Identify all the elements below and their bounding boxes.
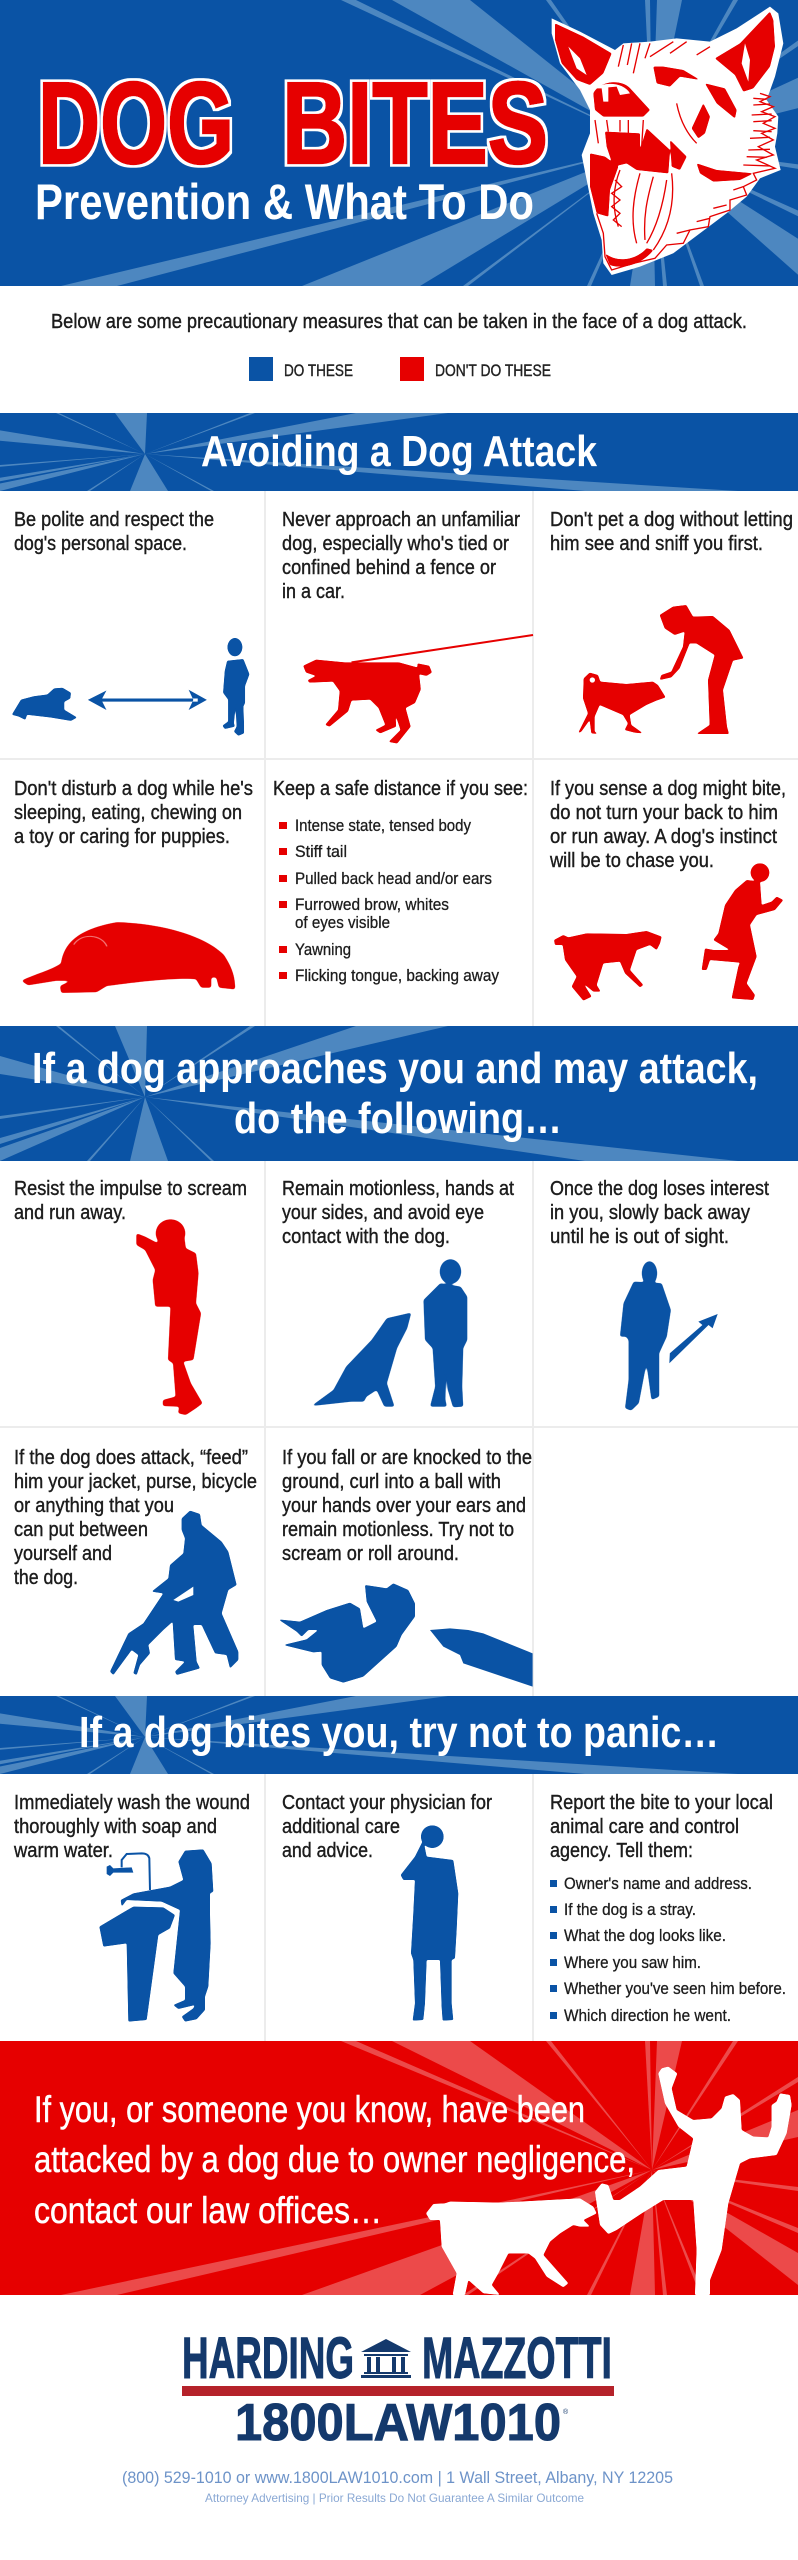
grid dividers, section 2 bbox=[0, 1161, 798, 1696]
text: be polite bbox=[14, 509, 214, 555]
text: if the dog does attack: or anything that you bbox=[14, 1495, 174, 1517]
text: if you fall: remain motionless. Try not to bbox=[282, 1519, 514, 1541]
panel: don't scream bbox=[14, 1178, 247, 1415]
text: if you sense: or run away. A dog's instinct bbox=[550, 826, 777, 848]
icon: snarling dog head bbox=[552, 7, 783, 275]
text: don't pet bbox=[550, 509, 793, 555]
icon: dog biting man bbox=[426, 2067, 792, 2295]
text: once the dog loses interest bbox=[550, 1178, 769, 1248]
warning signs list: Flicking tongue, backing away bbox=[295, 966, 499, 985]
warning signs list: Stiff tail bbox=[295, 842, 347, 861]
text: contact your physician: and advice. bbox=[282, 1840, 373, 1862]
text: don't pet: him see and sniff you first. bbox=[550, 533, 763, 555]
text: don't disturb: a toy or caring for puppies. bbox=[14, 826, 230, 848]
panel: back away bbox=[550, 1178, 769, 1411]
text: be polite: dog's personal space. bbox=[14, 533, 187, 555]
text: once the dog loses interest: until he is out of sight. bbox=[550, 1226, 729, 1248]
text: if you sense bbox=[549, 778, 786, 872]
text: if the dog does attack: yourself and bbox=[14, 1543, 112, 1565]
footer contact line: (800) 529-1010 or www.1800LAW1010.com | 1 Wall Street, Albany, NY 12205 bbox=[122, 2468, 673, 2487]
text: never approach bbox=[282, 509, 520, 603]
heading band: avoiding a dog attack bbox=[0, 413, 798, 491]
legend: do these bbox=[249, 357, 353, 381]
call to action text bbox=[34, 2089, 635, 2231]
icon: woman on phone bbox=[401, 1825, 458, 2021]
report details list: What the dog looks like. bbox=[564, 1926, 726, 1945]
panel: unfamiliar dog bbox=[282, 509, 533, 744]
text: if you fall: scream or roll around. bbox=[282, 1543, 459, 1565]
text: immediately wash bbox=[13, 1792, 250, 1862]
report details list bbox=[550, 1874, 786, 2025]
text: once the dog loses interest: in you, slowly back away bbox=[550, 1202, 750, 1224]
text: remain motionless: Remain motionless, hands at bbox=[282, 1178, 514, 1200]
text: keep a safe distance: Keep a safe distance if you see: bbox=[273, 778, 528, 800]
grid dividers, section 3 bbox=[265, 1774, 533, 2041]
text: report the bite: animal care and control bbox=[550, 1816, 739, 1838]
icon: man and sitting dog bbox=[312, 1259, 467, 1407]
icon: leashed dog bbox=[303, 635, 533, 744]
legend bbox=[249, 357, 551, 381]
text: never approach: confined behind a fence or bbox=[282, 557, 496, 579]
legend: don't do these: DON'T DO THESE bbox=[435, 361, 551, 380]
text: report the bite: Report the bite to your local bbox=[550, 1792, 773, 1814]
text: if you fall bbox=[282, 1447, 532, 1565]
report details list: Owner's name and address. bbox=[564, 1874, 752, 1893]
panel: remain motionless bbox=[282, 1178, 514, 1407]
panel: safe distance list bbox=[273, 778, 528, 985]
text: never approach: in a car. bbox=[282, 581, 345, 603]
legend: do these: DO THESE bbox=[284, 361, 353, 380]
text: remain motionless: your sides, and avoid eye bbox=[282, 1202, 484, 1224]
text: if you sense: will be to chase you. bbox=[549, 850, 714, 872]
text: if you fall: your hands over your ears and bbox=[282, 1495, 526, 1517]
icon: courthouse bbox=[361, 2339, 411, 2378]
logo: harding mazzotti: HARDING bbox=[182, 2326, 354, 2391]
text: if the dog does attack: can put between bbox=[14, 1519, 148, 1541]
text: resist the impulse: and run away. bbox=[14, 1202, 126, 1224]
heading band: if a dog approaches: do the following… bbox=[234, 1094, 562, 1143]
panel: report the bite bbox=[550, 1792, 786, 2025]
icon: dog jumping at man bbox=[110, 1511, 238, 1675]
legend: don't do these bbox=[400, 357, 551, 381]
text: contact your physician bbox=[282, 1792, 492, 1862]
call to action text: If you, or someone you know, have been bbox=[34, 2089, 585, 2130]
title: dog bites: DOG bbox=[38, 58, 234, 188]
text: immediately wash: thoroughly with soap and bbox=[14, 1816, 217, 1838]
text: never approach: Never approach an unfamiliar bbox=[282, 509, 520, 531]
report details list: Which direction he went. bbox=[564, 2006, 731, 2025]
intro sentence: Below are some precautionary measures that can be taken in the face of a dog attack. bbox=[51, 311, 747, 333]
text: if you sense: do not turn your back to him bbox=[550, 802, 778, 824]
text: don't disturb bbox=[14, 778, 253, 848]
text: don't disturb: Don't disturb a dog while he's bbox=[14, 778, 253, 800]
icon: man backing away with arrow bbox=[620, 1261, 718, 1411]
text: if the dog does attack: If the dog does attack, “feed” bbox=[14, 1447, 248, 1469]
warning signs list: Intense state, tensed body bbox=[295, 816, 471, 835]
panel: let him sniff bbox=[550, 509, 793, 734]
text: if the dog does attack bbox=[14, 1447, 257, 1589]
text: never approach: dog, especially who's tied or bbox=[282, 533, 509, 555]
icon: dog chasing running man bbox=[554, 863, 783, 1001]
panel: curl into a ball bbox=[278, 1447, 533, 1687]
panel: contact physician bbox=[282, 1792, 492, 2021]
footer disclaimer: Attorney Advertising | Prior Results Do Not Guarantee A Similar Outcome bbox=[205, 2491, 584, 2505]
call to action text: attacked by a dog due to owner negligence, bbox=[34, 2139, 635, 2180]
report details list: Where you saw him. bbox=[564, 1953, 701, 1972]
panel: personal space bbox=[12, 509, 249, 736]
heading band: if a dog approaches bbox=[0, 1026, 798, 1161]
title: dog bites bbox=[38, 58, 548, 188]
title: dog bites: BITES bbox=[282, 58, 548, 188]
icon: woman petting dog bbox=[578, 605, 744, 734]
subtitle: Prevention & What To Do bbox=[35, 174, 534, 230]
icon: screaming woman bbox=[136, 1219, 203, 1415]
icon: dog lying, arrow and boy bbox=[12, 638, 249, 736]
heading band: avoiding a dog attack: Avoiding a Dog Attack bbox=[201, 427, 597, 476]
warning signs list: Yawning bbox=[295, 940, 351, 959]
panel: sleeping dog bbox=[14, 778, 253, 993]
warning signs list bbox=[279, 816, 499, 985]
text: once the dog loses interest: Once the dog loses interest bbox=[550, 1178, 769, 1200]
panel: feed him bbox=[14, 1447, 257, 1675]
call to action banner bbox=[0, 2041, 798, 2295]
warning signs list: of eyes visible bbox=[295, 913, 390, 932]
text: immediately wash: warm water. bbox=[13, 1840, 113, 1862]
heading band: if a dog bites you bbox=[0, 1696, 798, 1774]
text: if you fall: If you fall or are knocked to the bbox=[282, 1447, 532, 1469]
icon: girl washing at sink bbox=[99, 1849, 213, 2022]
text: if the dog does attack: the dog. bbox=[14, 1567, 78, 1589]
warning signs list: Pulled back head and/or ears bbox=[295, 869, 492, 888]
panel: don't run bbox=[549, 778, 786, 1001]
text: report the bite bbox=[550, 1792, 773, 1862]
text: if the dog does attack: him your jacket, purse, bicycle bbox=[14, 1471, 257, 1493]
report details list: If the dog is a stray. bbox=[564, 1900, 696, 1919]
text: if you fall: ground, curl into a ball with bbox=[282, 1471, 501, 1493]
icon: curled person and dog bbox=[278, 1583, 533, 1687]
call to action text: contact our law offices… bbox=[34, 2190, 382, 2231]
grid dividers, section 1 bbox=[0, 491, 798, 1026]
text: contact your physician: Contact your physician for bbox=[282, 1792, 492, 1814]
logo: harding mazzotti bbox=[182, 2326, 614, 2452]
text: report the bite: agency. Tell them: bbox=[550, 1840, 693, 1862]
text: don't disturb: sleeping, eating, chewing on bbox=[14, 802, 242, 824]
warning signs list: Furrowed brow, whites bbox=[295, 895, 449, 914]
logo: harding mazzotti: ® bbox=[563, 2408, 569, 2416]
text: remain motionless bbox=[282, 1178, 514, 1248]
text: be polite: Be polite and respect the bbox=[14, 509, 214, 531]
text: resist the impulse: Resist the impulse to scream bbox=[14, 1178, 247, 1200]
text: immediately wash: Immediately wash the wound bbox=[14, 1792, 250, 1814]
text: remain motionless: contact with the dog. bbox=[282, 1226, 450, 1248]
logo: harding mazzotti: 1800LAW1010 bbox=[235, 2394, 561, 2452]
icon: sleeping dog bbox=[21, 922, 235, 993]
panel: wash the wound bbox=[13, 1792, 250, 2022]
text: contact your physician: additional care bbox=[282, 1816, 400, 1838]
header banner bbox=[0, 0, 798, 286]
logo: harding mazzotti: MAZZOTTI bbox=[422, 2326, 612, 2391]
text: resist the impulse bbox=[14, 1178, 247, 1224]
